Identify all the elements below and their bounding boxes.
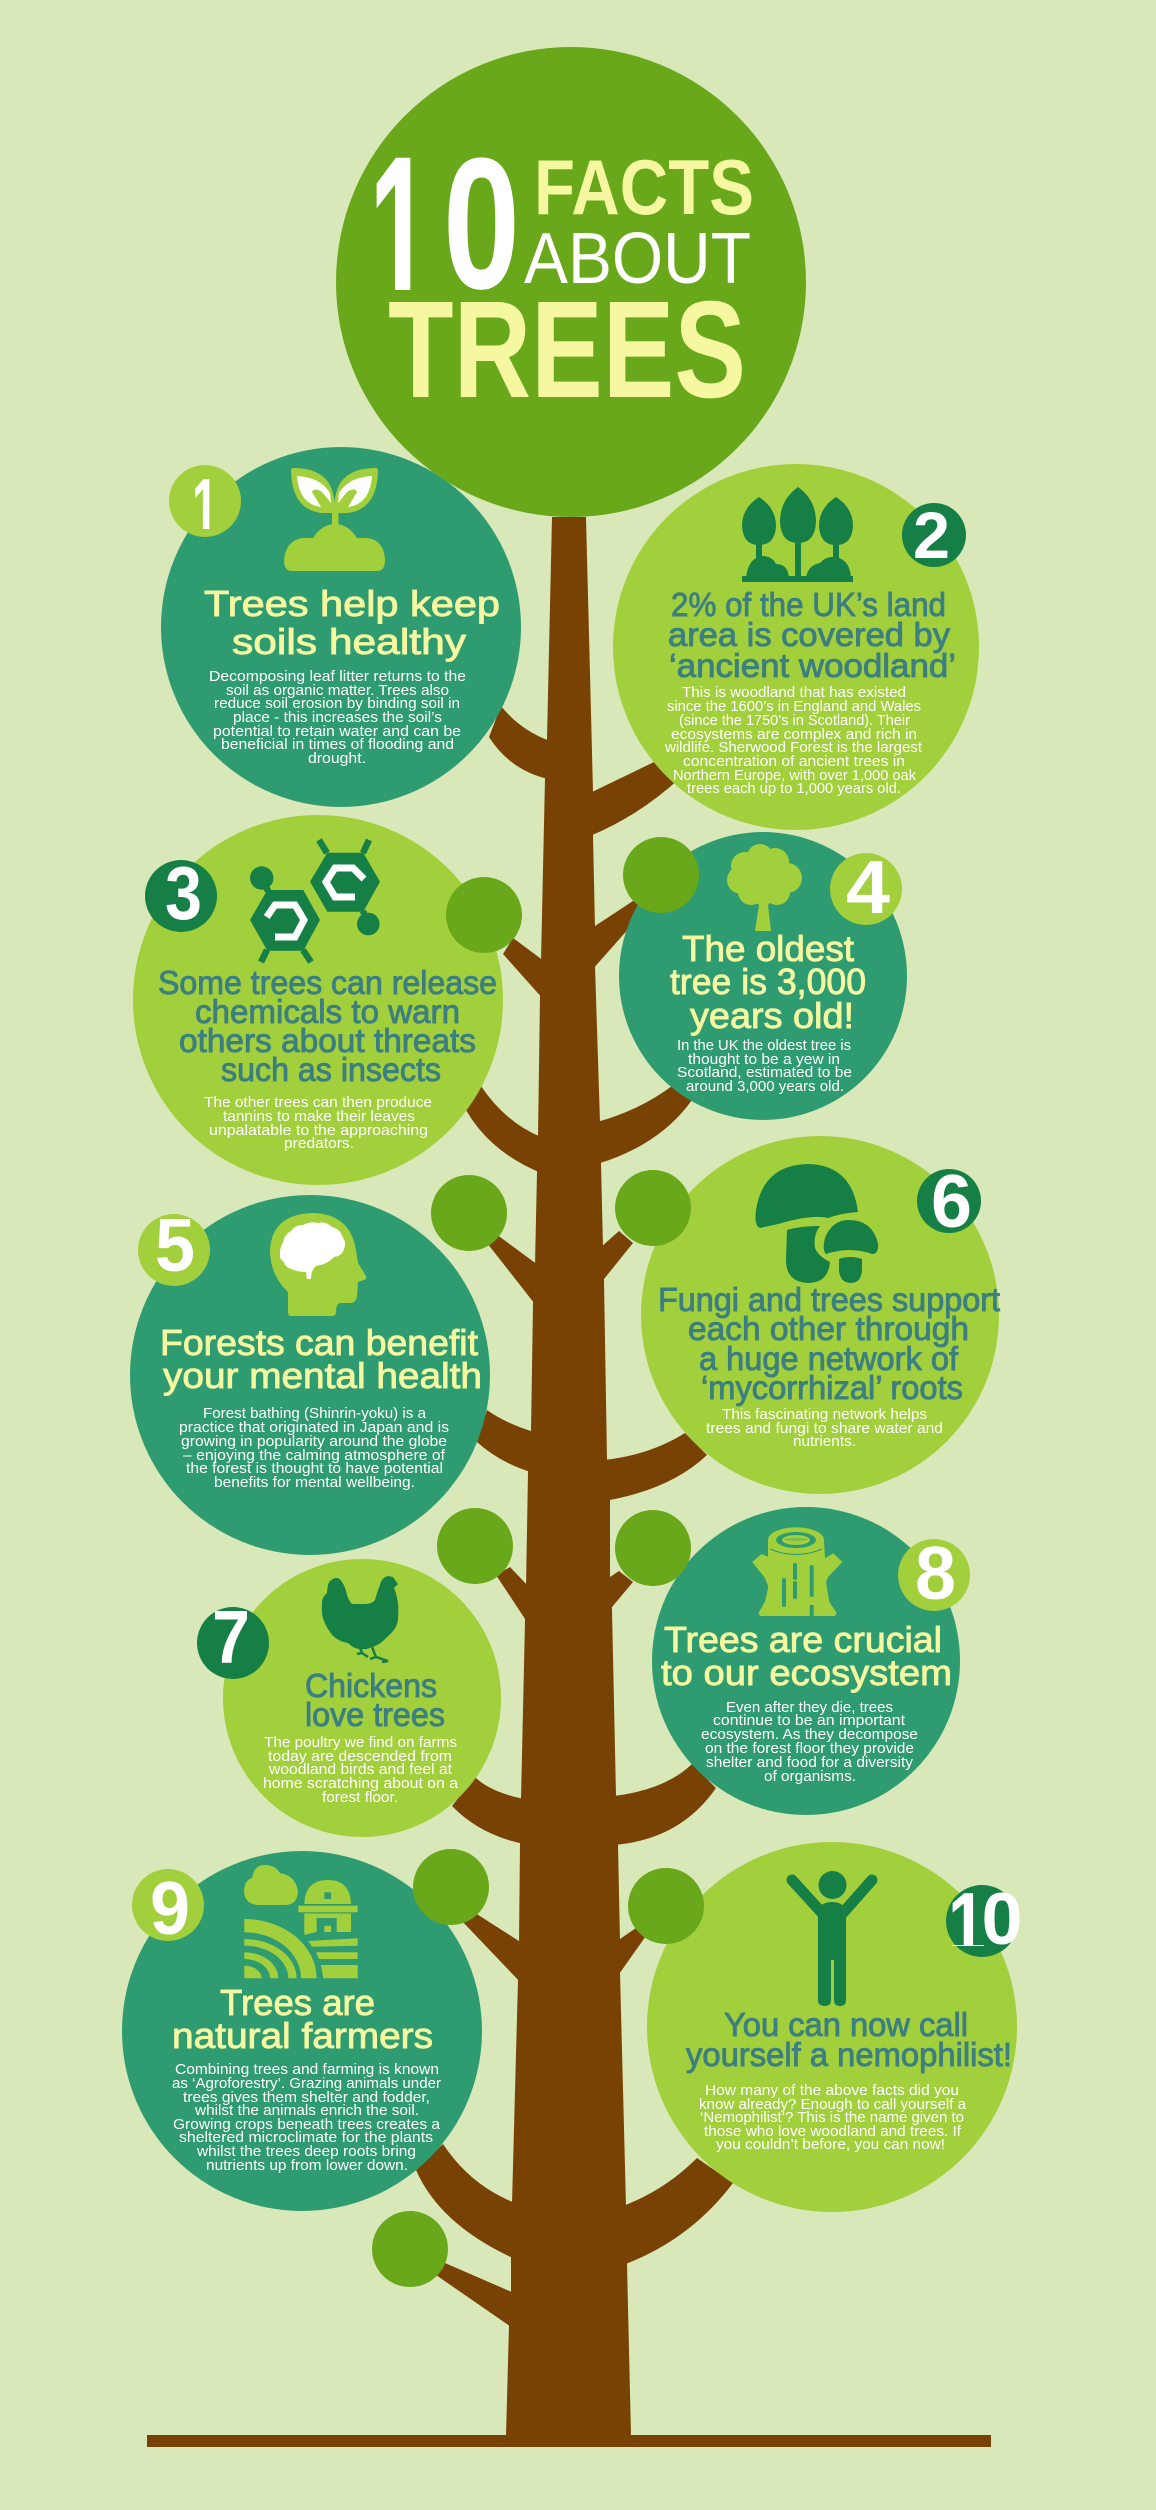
number badges: 3	[165, 851, 202, 935]
body text: Even after they die, trees	[726, 1700, 893, 1716]
body text: The poultry we find on farms	[264, 1735, 457, 1751]
body text: This fascinating network helps	[722, 1407, 927, 1423]
icon: three trees	[742, 487, 853, 582]
icon: mushrooms	[756, 1164, 878, 1283]
body text: predators.	[284, 1136, 354, 1152]
body text: growing in popularity around the globe	[181, 1434, 447, 1450]
body text: nutrients up from lower down.	[206, 2158, 408, 2174]
body text: trees each up to 1,000 years old.	[687, 781, 901, 797]
number badges: 1	[948, 1874, 986, 1973]
heading	[661, 1619, 952, 1693]
heading: to our ecosystem	[661, 1652, 952, 1693]
body text	[677, 1038, 852, 1095]
body text: Decomposing leaf litter returns to the	[209, 669, 466, 685]
panel: fact 7	[223, 1559, 501, 1837]
number badges: 6	[931, 1159, 972, 1243]
body text	[699, 2083, 967, 2153]
icon: person with raised arms	[792, 1871, 872, 2006]
heading	[172, 1982, 433, 2056]
body text	[664, 685, 922, 797]
heading: such as insects	[221, 1051, 441, 1088]
body text: Growing crops beneath trees creates a	[173, 2117, 441, 2133]
body text: reduce soil erosion by binding soil in	[214, 696, 460, 712]
infographic canvas	[122, 47, 1020, 2447]
body text: those who love woodland and trees. If	[704, 2124, 962, 2140]
body text: ecosystem. As they decompose	[701, 1727, 918, 1743]
panel: fact 4	[619, 832, 907, 1120]
body text: This is woodland that has existed	[682, 685, 906, 701]
body text: How many of the above facts did you	[705, 2083, 959, 2099]
heading: Some trees can release	[158, 964, 497, 1001]
body text: on the forest floor they provide	[705, 1741, 914, 1757]
body text: whilst the animals enrich the soil.	[194, 2103, 419, 2119]
title: 0	[443, 119, 520, 328]
body text: Scotland, estimated to be	[677, 1065, 852, 1081]
heading: ‘mycorrhizal’ roots	[701, 1369, 963, 1406]
tree trunk, branches and ground	[147, 517, 991, 2447]
body text: nutrients.	[793, 1434, 856, 1450]
body text: whilst the trees deep roots bring	[196, 2144, 416, 2160]
heading: natural farmers	[172, 2015, 433, 2056]
body text: shelter and food for a diversity	[706, 1755, 914, 1771]
heading: area is covered by	[668, 616, 951, 653]
body text: (since the 1750’s in Scotland). Their	[679, 713, 910, 729]
body text	[172, 2062, 441, 2174]
heading: soils healthy	[232, 621, 466, 662]
body text: beneficial in times of flooding and	[221, 737, 454, 753]
heading: The oldest	[682, 928, 854, 969]
body text: place - this increases the soil’s	[233, 710, 442, 726]
heading: You can now call	[724, 2006, 968, 2043]
heading	[305, 1667, 445, 1733]
body text: The other trees can then produce	[204, 1095, 432, 1111]
number badges: 8	[915, 1531, 956, 1615]
heading: Forests can benefit	[160, 1322, 478, 1363]
body text: practice that originated in Japan and is	[179, 1420, 449, 1436]
body text: unpalatable to the approaching	[209, 1123, 428, 1139]
title: FACTS	[534, 143, 754, 231]
body text	[179, 1406, 449, 1491]
heading: chemicals to warn	[195, 993, 460, 1030]
body text: since the 1600’s in England and Wales	[667, 699, 921, 715]
body text: around 3,000 years old.	[686, 1079, 844, 1095]
heading: your mental health	[163, 1355, 482, 1396]
heading	[204, 583, 500, 662]
heading: ‘ancient woodland’	[669, 647, 956, 684]
title: ABOUT	[524, 219, 751, 299]
title circle	[336, 47, 806, 517]
heading: 2% of the UK’s land	[671, 586, 946, 623]
heading: Trees are crucial	[664, 1619, 942, 1660]
body text: sheltered microclimate for the plants	[179, 2130, 433, 2146]
body text: concentration of ancient trees in	[683, 754, 905, 770]
heading	[686, 2006, 1012, 2073]
body text: Forest bathing (Shinrin-yoku) is a	[203, 1406, 427, 1422]
heading	[158, 964, 497, 1088]
heading: yourself a nemophilist!	[686, 2036, 1012, 2073]
number badges: 2	[913, 498, 950, 572]
body text: ‘Nemophilist’? This is the name given to	[700, 2110, 964, 2126]
body text: potential to retain water and can be	[213, 724, 461, 740]
heading	[670, 928, 866, 1036]
body text: today are descended from	[268, 1749, 452, 1765]
icon: tree	[727, 844, 802, 931]
body text	[209, 669, 466, 767]
icon: tree stump	[752, 1527, 842, 1616]
body text: In the UK the oldest tree is	[677, 1038, 851, 1054]
icon: head with brain	[270, 1213, 366, 1316]
body text: wildlife. Sherwood Forest is the largest	[664, 740, 922, 756]
body text: – enjoying the calming atmosphere of	[183, 1448, 446, 1464]
body text: you couldn’t before, you can now!	[716, 2137, 945, 2153]
body text: Combining trees and farming is known	[175, 2062, 439, 2078]
body text: woodland birds and feel at	[268, 1762, 452, 1778]
body text: know already? Enough to call yourself a	[699, 2097, 967, 2113]
heading: each other through	[688, 1310, 969, 1347]
body text	[263, 1735, 459, 1806]
body text: trees and fungi to share water and	[706, 1421, 943, 1437]
number badges	[132, 462, 1022, 1973]
body text	[706, 1407, 943, 1450]
body text: drought.	[308, 751, 366, 767]
title: 1	[369, 108, 431, 365]
title: TREES	[388, 273, 746, 427]
heading: Chickens	[305, 1667, 437, 1704]
icon: sprout	[284, 468, 385, 571]
body text: tannins to make their leaves	[223, 1109, 415, 1125]
body text: thought to be a yew in	[688, 1052, 840, 1068]
panel: fact 2	[613, 464, 979, 830]
body text: Northern Europe, with over 1,000 oak	[673, 768, 917, 784]
body text: of organisms.	[764, 1769, 856, 1785]
heading	[658, 1281, 1000, 1406]
body text	[701, 1700, 918, 1785]
body text	[204, 1095, 432, 1152]
body text: as ‘Agroforestry’. Grazing animals under	[172, 2076, 441, 2092]
number badges: 9	[150, 1866, 190, 1950]
heading: a huge network of	[699, 1340, 959, 1377]
icon: chemical molecules	[250, 840, 380, 962]
number badges: 5	[155, 1203, 195, 1287]
panel: fact 9	[122, 1851, 482, 2211]
small canopy leaves	[372, 837, 704, 2287]
icon: farm and fields	[244, 1865, 358, 1978]
heading: love trees	[305, 1696, 445, 1733]
body text: soil as organic matter. Trees also	[226, 683, 449, 699]
panel: fact 8	[652, 1507, 960, 1815]
heading: Fungi and trees support	[658, 1281, 1000, 1318]
heading: Trees help keep	[204, 583, 500, 624]
body text: home scratching about on a	[263, 1776, 459, 1792]
panel: fact 3	[133, 815, 503, 1185]
heading: Trees are	[220, 1982, 375, 2023]
panel: fact 10	[647, 1842, 1017, 2212]
title	[376, 157, 752, 398]
number badges: 1	[192, 462, 218, 557]
heading	[160, 1322, 482, 1396]
number badges: 0	[982, 1879, 1022, 1960]
heading: tree is 3,000	[670, 961, 866, 1002]
heading: others about threats	[179, 1022, 476, 1059]
panel: fact 1	[161, 447, 521, 807]
panel: fact 5	[130, 1195, 490, 1555]
body text: ecosystems are complex and rich in	[671, 727, 917, 743]
body text: continue to be an important	[713, 1713, 905, 1729]
heading: years old!	[690, 995, 854, 1036]
number badges: 4	[846, 845, 890, 929]
number badges: 7	[212, 1595, 250, 1679]
icon: chicken	[322, 1576, 398, 1662]
body text: the forest is thought to have potential	[186, 1461, 443, 1477]
body text: trees gives them shelter and fodder,	[183, 2090, 430, 2106]
body text: benefits for mental wellbeing.	[214, 1475, 415, 1491]
panel: fact 6	[641, 1136, 1000, 1494]
body text: forest floor.	[322, 1790, 398, 1806]
heading	[668, 586, 956, 684]
